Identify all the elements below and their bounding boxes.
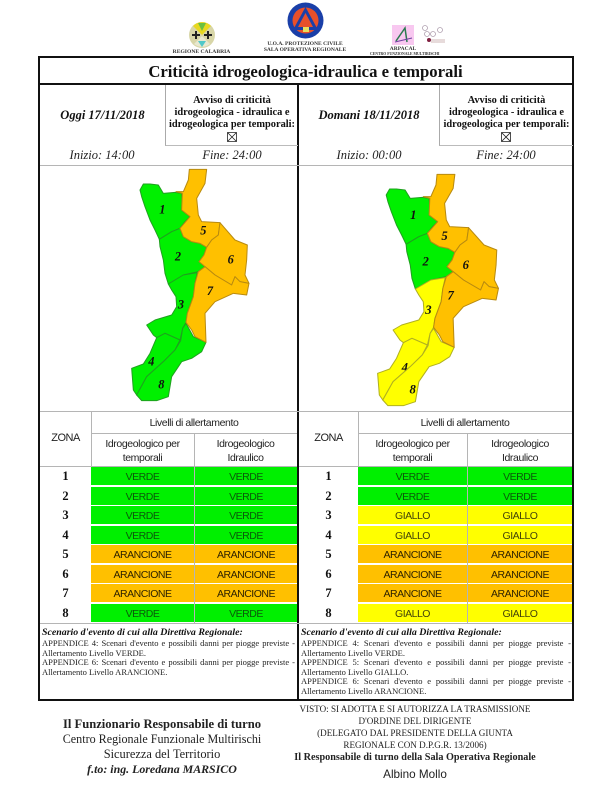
- column heading: temporali: temporali: [393, 452, 432, 464]
- table: today alert levels: [40, 412, 297, 623]
- row 4: GIALLO: [503, 530, 537, 542]
- row 1: VERDE: [396, 471, 429, 483]
- zone 4: [378, 338, 427, 400]
- column heading: temporali: Idrogeologico per: [375, 438, 450, 450]
- zone 3: 3: [177, 297, 184, 311]
- row 7: [62, 584, 297, 602]
- row 7: ARANCIONE: [384, 588, 441, 600]
- signature: duty officer: Centro Regionale Funzionale Multirischi: [63, 732, 261, 746]
- row 5: [325, 545, 572, 563]
- row 8: 8: [325, 606, 332, 620]
- signature: approval: Il Responsabile di turno della Sala Operativa Regionale: [294, 752, 536, 763]
- zone 5: [423, 174, 469, 252]
- panel: tomorrow scenario text: [301, 627, 571, 696]
- panel: tomorrow scenario text: Allertamento Livello VERDE.: [301, 648, 405, 658]
- row 4: [325, 526, 572, 544]
- tomorrow notice box: [439, 85, 573, 146]
- row 2: [325, 487, 572, 505]
- row 1: 1: [62, 469, 69, 483]
- today start time: Inizio: 14:00: [70, 148, 134, 162]
- signature: approval: VISTO: SI ADOTTA E SI AUTORIZZA LA TRASMISSIONE: [300, 704, 530, 714]
- logo: Regione Calabria: REGIONE CALABRIA: [173, 49, 230, 55]
- row 1: [325, 467, 572, 485]
- zone 3: 3: [424, 303, 432, 317]
- signature: approval: REGIONALE CON D.P.G.R. 13/2006): [343, 740, 487, 750]
- column heading: idraulico: [217, 438, 274, 464]
- today notice box: idrogeologica - idraulica e: [175, 107, 289, 118]
- today notice box: [165, 85, 298, 146]
- row 8: [62, 604, 297, 622]
- map: today: [131, 168, 250, 402]
- row 5: ARANCIONE: [491, 549, 549, 561]
- row 4: VERDE: [229, 530, 263, 542]
- row 1: VERDE: [229, 471, 263, 483]
- zone column heading: ZONA: [314, 432, 343, 444]
- logo: Arpacal: ARPACAL: [390, 46, 416, 52]
- zone 3: [147, 273, 197, 340]
- panel: today scenario text: [42, 627, 295, 676]
- zone 1: [140, 184, 190, 239]
- row 4: 4: [62, 528, 69, 542]
- row 6: 6: [325, 566, 332, 580]
- panel: today scenario text: Allertamento Livello VERDE.: [42, 648, 146, 658]
- row 6: 6: [62, 566, 69, 580]
- map: tomorrow: [377, 174, 499, 406]
- zone 6: [199, 223, 249, 285]
- logo: Regione Calabria: [172, 22, 230, 55]
- row 5: ARANCIONE: [217, 549, 275, 561]
- row 2: [62, 487, 297, 505]
- row 5: 5: [325, 547, 332, 561]
- today notice box: idrogeologica per temporali:: [169, 119, 295, 130]
- zone 2: 2: [174, 250, 181, 264]
- signature: duty officer: f.to: ing. Loredana MARSICO: [87, 762, 237, 776]
- zone 8: [137, 323, 206, 401]
- row 3: VERDE: [229, 510, 263, 522]
- panel: tomorrow header: [318, 85, 573, 162]
- zone 7: [434, 272, 498, 347]
- column heading: idraulico: Idraulico: [502, 452, 538, 464]
- panel: tomorrow scenario text: Scenario d'evento di cui alla Direttiva Regionale:: [301, 627, 502, 638]
- row 6: ARANCIONE: [114, 568, 171, 580]
- signature: duty officer: Il Funzionario Responsabile di turno: [63, 717, 261, 731]
- zone 6: 6: [463, 258, 470, 272]
- column heading: temporali: [375, 438, 450, 464]
- row 7: ARANCIONE: [217, 588, 275, 600]
- row 5: ARANCIONE: [114, 549, 171, 561]
- panel: tomorrow scenario text: Allertamento Livello GIALLO.: [301, 666, 408, 676]
- row 4: 4: [325, 528, 332, 542]
- zone 7: [186, 267, 249, 342]
- logo: Protezione Civile: U.O.A. PROTEZIONE CIVILE: [267, 41, 343, 47]
- column heading: idraulico: Idrogeologico: [217, 438, 274, 450]
- row 5: 5: [62, 547, 69, 561]
- row 3: 3: [325, 508, 332, 522]
- tomorrow notice box: Avviso di criticità: [468, 95, 545, 106]
- today end time: Fine: 24:00: [202, 148, 262, 162]
- row 6: ARANCIONE: [217, 568, 275, 580]
- row 2: VERDE: [126, 490, 159, 502]
- title: Criticità idrogeologica-idraulica e temporali: [148, 62, 463, 81]
- row 3: [325, 506, 572, 524]
- logo: Protezione Civile: SALA OPERATIVA REGIONALE: [264, 46, 346, 52]
- column heading: idraulico: [491, 438, 549, 464]
- row 3: GIALLO: [503, 510, 537, 522]
- panel: today scenario text: Scenario d'evento di cui alla Direttiva Regionale:: [42, 627, 243, 638]
- row 2: VERDE: [229, 490, 263, 502]
- row 3: GIALLO: [395, 510, 430, 522]
- column heading: idraulico: Idrogeologico: [491, 438, 549, 450]
- zone 2: 2: [421, 255, 429, 269]
- row 4: [62, 526, 297, 544]
- panel: tomorrow scenario text: APPENDICE 6: Scenari d'evento e possibili danni per piogge previste -: [301, 676, 571, 686]
- zone 5: [176, 169, 220, 247]
- zone 2: [406, 233, 455, 289]
- zone column heading: ZONA: [51, 432, 80, 444]
- logo: Protezione Civile: [264, 2, 346, 52]
- row 1: VERDE: [503, 471, 537, 483]
- signature: approval: (DELEGATO DAL PRESIDENTE DELLA GIUNTA: [317, 728, 513, 738]
- row 1: 1: [325, 469, 332, 483]
- zone 7: 7: [207, 284, 214, 298]
- zone 7: 7: [448, 289, 455, 303]
- row 8: 8: [62, 606, 69, 620]
- table: tomorrow alert levels: [299, 412, 572, 623]
- row 8: GIALLO: [503, 608, 537, 620]
- column heading: temporali: temporali: [123, 452, 162, 464]
- row 3: [62, 506, 297, 524]
- row 6: [62, 565, 297, 583]
- row 7: 7: [62, 586, 69, 600]
- row 6: ARANCIONE: [491, 568, 549, 580]
- zone 8: [383, 328, 454, 406]
- row 3: VERDE: [126, 510, 159, 522]
- logo: Arpacal: CENTRO FUNZIONALE MULTIRISCHI: [370, 52, 439, 56]
- panel: today scenario text: Allertamento Livello ARANCIONE.: [42, 666, 167, 676]
- row 1: VERDE: [126, 471, 159, 483]
- row 1: [62, 467, 297, 485]
- signature: approval: Albino Mollo: [383, 768, 447, 781]
- zone 8: 8: [409, 382, 417, 396]
- row 7: 7: [325, 586, 332, 600]
- signature: duty officer: Sicurezza del Territorio: [104, 747, 220, 761]
- row 2: VERDE: [396, 490, 429, 502]
- today date: Oggi 17/11/2018: [60, 108, 145, 122]
- row 5: ARANCIONE: [384, 549, 441, 561]
- tomorrow date: Domani 18/11/2018: [318, 108, 420, 122]
- levels heading: Livelli di allertamento: [421, 417, 509, 429]
- zone 3: [393, 278, 445, 345]
- row 6: [325, 565, 572, 583]
- row 4: VERDE: [126, 530, 159, 542]
- panel: tomorrow scenario text: APPENDICE 4: Scenari d'evento e possibili danni per piogge previste -: [301, 638, 571, 648]
- signature: duty officer: [63, 717, 261, 776]
- logo: Arpacal: [370, 25, 445, 56]
- row 3: 3: [62, 508, 69, 522]
- zone 2: [159, 228, 207, 284]
- tomorrow start time: Inizio: 00:00: [337, 148, 401, 162]
- zone 1: [386, 189, 438, 244]
- zone 8: 8: [158, 377, 164, 391]
- panel: outer frame: [38, 56, 574, 701]
- zone 4: 4: [401, 360, 408, 374]
- tomorrow notice box: idrogeologica per temporali:: [443, 119, 570, 130]
- signature: approval: D'ORDINE DEL DIRIGENTE: [359, 716, 471, 726]
- row 2: 2: [62, 488, 69, 502]
- zone 4: 4: [147, 355, 154, 369]
- zone 5: 5: [441, 229, 448, 243]
- row 2: VERDE: [503, 490, 537, 502]
- today notice box: Avviso di criticità: [193, 95, 271, 106]
- row 7: ARANCIONE: [491, 588, 549, 600]
- column heading: temporali: [105, 438, 180, 464]
- row 8: VERDE: [126, 608, 159, 620]
- column heading: temporali: Idrogeologico per: [105, 438, 180, 450]
- row 8: VERDE: [229, 608, 263, 620]
- row 2: 2: [325, 488, 332, 502]
- tomorrow notice box: idrogeologica - idraulica e: [449, 107, 564, 118]
- panel: today scenario text: APPENDICE 6: Scenari d'evento e possibili danni per piogge previste -: [42, 657, 295, 667]
- tomorrow end time: Fine: 24:00: [476, 148, 536, 162]
- row 4: GIALLO: [395, 530, 430, 542]
- zone 1: 1: [410, 208, 416, 222]
- panel: tomorrow scenario text: APPENDICE 5: Scenari d'evento e possibili danni per piogge previste -: [301, 657, 571, 667]
- zone 5: 5: [200, 224, 206, 238]
- row 5: [62, 545, 297, 563]
- panel: today header: [60, 85, 298, 162]
- zone 6: 6: [228, 252, 235, 266]
- row 8: GIALLO: [395, 608, 430, 620]
- row 8: [325, 604, 572, 622]
- panel: today scenario text: APPENDICE 4: Scenari d'evento e possibili danni per piogge previste -: [42, 638, 295, 648]
- zone 4: [132, 333, 180, 395]
- row 7: [325, 584, 572, 602]
- levels heading: Livelli di allertamento: [150, 417, 238, 429]
- column heading: idraulico: Idraulico: [227, 452, 264, 464]
- signature: approval: [294, 704, 536, 781]
- zone 1: 1: [159, 202, 165, 216]
- row 6: ARANCIONE: [384, 568, 441, 580]
- zone 6: [447, 228, 498, 290]
- row 7: ARANCIONE: [114, 588, 171, 600]
- panel: tomorrow scenario text: Allertamento Livello ARANCIONE.: [301, 686, 426, 696]
